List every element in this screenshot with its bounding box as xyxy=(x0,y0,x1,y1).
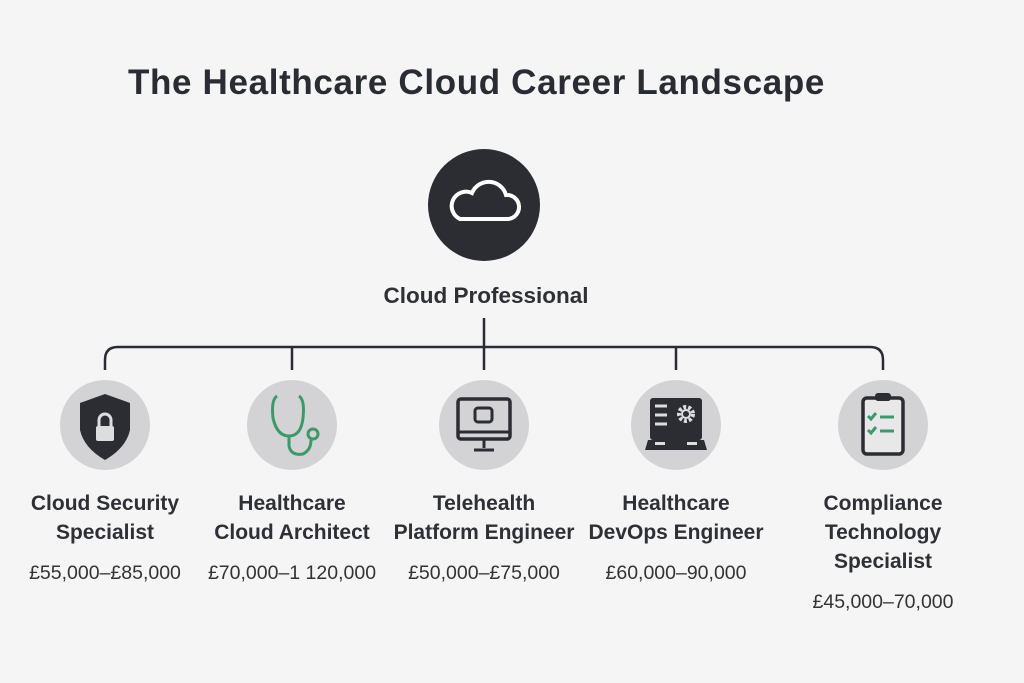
salary 4: £60,000–90,000 xyxy=(606,562,746,584)
label: architect xyxy=(214,492,370,544)
salary 1: £55,000–£85,000 xyxy=(29,562,181,584)
label: architect: Cloud Architect xyxy=(214,521,370,544)
salary 2: £70,000–1 120,000 xyxy=(208,562,376,584)
label: cloud security: Cloud Security xyxy=(31,492,179,515)
title: The Healthcare Cloud Career Landscape xyxy=(128,63,825,102)
label: compliance: Technology xyxy=(825,521,941,544)
icon: monitor xyxy=(439,380,529,470)
label: compliance xyxy=(823,492,943,573)
label: telehealth xyxy=(394,492,574,544)
icon: cloud professional xyxy=(428,149,540,261)
icon: stethoscope xyxy=(247,380,337,470)
label: compliance: Compliance xyxy=(823,492,943,515)
label: telehealth: Platform Engineer xyxy=(394,521,574,544)
heading: Cloud Professional: Cloud Professional xyxy=(383,283,589,308)
label: devops: Healthcare xyxy=(622,492,730,515)
salary 5: £45,000–70,000 xyxy=(812,591,953,613)
label: cloud security xyxy=(31,492,179,544)
salary 3: £50,000–£75,000 xyxy=(408,562,560,584)
icon: devops laptop xyxy=(631,380,721,470)
label: devops: DevOps Engineer xyxy=(588,521,764,544)
icon: clipboard xyxy=(838,380,928,470)
icon: shield xyxy=(60,380,150,470)
label: telehealth: Telehealth xyxy=(433,492,535,515)
label: cloud security: Specialist xyxy=(56,521,154,544)
label: architect: Healthcare xyxy=(238,492,346,515)
label: compliance: Specialist xyxy=(834,550,932,573)
label: devops xyxy=(588,492,764,544)
